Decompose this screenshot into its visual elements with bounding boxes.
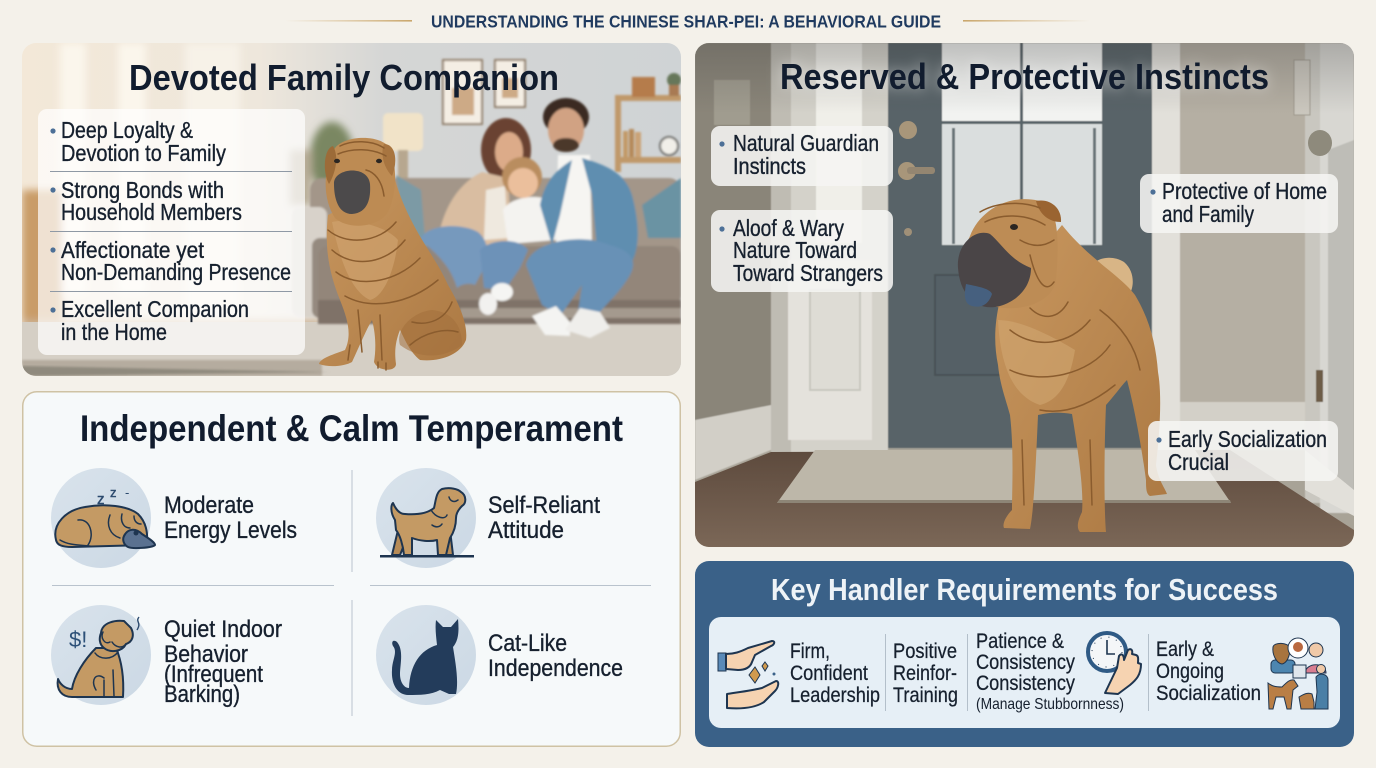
item: cat-like independence	[376, 605, 623, 705]
icon: sleeping dog	[51, 468, 155, 568]
item: quiet indoor behavior	[51, 605, 282, 708]
label: quiet indoor behavior: Quiet Indoor	[164, 616, 282, 643]
dog sitting	[319, 138, 466, 370]
label: cat-like independence: Cat-Like	[488, 630, 567, 657]
icon: guiding hands	[718, 641, 778, 708]
callout: aloof and wary	[711, 210, 893, 292]
text: early and ongoing socialization: Early &	[1156, 637, 1214, 661]
callout: natural guardian instincts	[711, 126, 893, 186]
callout: protective of home: Protective of Home	[1162, 178, 1327, 204]
callout: early socialization	[1148, 421, 1338, 481]
item: self-reliant attitude	[376, 468, 600, 568]
text: early and ongoing socialization: Ongoing	[1156, 659, 1224, 683]
photo: hallway with dog	[695, 43, 1354, 547]
floor	[695, 450, 1354, 547]
man	[543, 98, 589, 136]
woman	[481, 118, 531, 182]
text: positive reinforcement training	[893, 639, 958, 707]
heading: reserved and protective instincts: Reserved & Protective Instincts	[780, 56, 1269, 97]
icon: dogs and people	[1268, 638, 1328, 709]
callout: aloof and wary: Nature Toward	[733, 237, 857, 263]
carpet edge	[22, 366, 330, 376]
text: patience and consistency: (Manage Stubbornness)	[976, 696, 1124, 713]
icon: clock and hand	[1088, 633, 1141, 694]
panel: independent and calm temperament	[23, 392, 680, 746]
carpet	[22, 322, 681, 376]
plant	[310, 122, 354, 194]
label: quiet indoor behavior: Barking)	[164, 681, 240, 708]
label: cat-like independence: Independence	[488, 655, 623, 682]
label: quiet indoor behavior	[164, 616, 282, 708]
panel: reserved and protective instincts	[695, 43, 1354, 547]
heading: key handler requirements: Key Handler Requirements for Success	[771, 572, 1278, 607]
label: quiet indoor behavior: (Infrequent	[164, 661, 263, 688]
door hardware	[899, 121, 917, 139]
icon: cat silhouette	[376, 605, 476, 705]
callout: protective of home: and Family	[1162, 201, 1254, 227]
icon: sleeping dog: z	[97, 491, 104, 508]
card: family traits list: Affectionate yet	[61, 237, 205, 263]
callout: natural guardian instincts: Instincts	[733, 153, 806, 179]
text: firm confident leadership	[790, 639, 880, 707]
picture frames	[443, 60, 482, 124]
card: family traits list: Household Members	[61, 199, 242, 225]
icon: quiet dog	[51, 605, 151, 705]
label: moderate energy levels: Moderate	[164, 492, 254, 519]
lamp	[383, 113, 423, 151]
callout: aloof and wary: Aloof & Wary	[733, 215, 844, 241]
text: firm confident leadership: Firm,	[790, 639, 830, 663]
callout: early socialization: Crucial	[1168, 449, 1229, 475]
card: family traits list: Non-Demanding Presence	[61, 259, 291, 285]
panel: key handler requirements	[695, 561, 1354, 747]
shelf	[615, 95, 681, 101]
rug	[777, 450, 1231, 503]
panel: devoted family companion	[22, 43, 681, 376]
card: family traits list	[38, 109, 305, 355]
icon: quiet dog: $!	[69, 627, 87, 652]
photo: family room with dog	[22, 43, 681, 376]
text: positive reinforcement training: Reinfor-	[893, 661, 957, 685]
text: early and ongoing socialization	[1156, 637, 1261, 705]
text: positive reinforcement training: Positive	[893, 639, 957, 663]
label: moderate energy levels	[164, 492, 297, 544]
item: moderate energy levels	[51, 468, 297, 568]
text: early and ongoing socialization: Socialization	[1156, 681, 1261, 705]
callout: aloof and wary: Toward Strangers	[733, 260, 883, 286]
heading: reserved and protective instincts: Reserved & Protective Instincts	[780, 56, 1269, 97]
icon: sleeping dog: z	[110, 485, 116, 500]
card: family traits list: Excellent Companion	[61, 296, 249, 322]
text: firm confident leadership: Leadership	[790, 683, 880, 707]
card: family traits list: Deep Loyalty &	[61, 117, 193, 143]
heading: independent and calm temperament: Independent & Calm Temperament	[80, 408, 623, 449]
text: patience and consistency: Consistency	[976, 671, 1075, 695]
sofa	[309, 176, 681, 254]
card: family traits list: Strong Bonds with	[61, 177, 224, 203]
text: patience and consistency: Patience &	[976, 629, 1064, 653]
label: self-reliant attitude: Self-Reliant	[488, 492, 600, 519]
inner card	[709, 617, 1340, 728]
text: patience and consistency: Consistency	[976, 650, 1075, 674]
text: positive reinforcement training: Training	[893, 683, 958, 707]
icon: standing dog	[376, 468, 476, 568]
label: self-reliant attitude: Attitude	[488, 517, 564, 544]
dog standing	[958, 199, 1167, 532]
callout: natural guardian instincts: Natural Guardian	[733, 130, 879, 156]
text: firm confident leadership: Confident	[790, 661, 868, 685]
callout: protective of home	[1140, 174, 1338, 233]
child	[503, 197, 560, 244]
callout: early socialization: Early Socialization	[1168, 426, 1327, 452]
card: family traits list: Devotion to Family	[61, 140, 226, 166]
icon: sleeping dog: -	[125, 485, 129, 500]
cushions	[396, 175, 426, 252]
card: family traits list: in the Home	[61, 319, 167, 345]
label: moderate energy levels: Energy Levels	[164, 517, 297, 544]
label: quiet indoor behavior: Behavior	[164, 641, 248, 668]
text: patience and consistency	[976, 629, 1124, 713]
page title: UNDERSTANDING THE CHINESE SHAR-PEI: A BEHAVIORAL GUIDE	[431, 12, 941, 32]
label: cat-like independence	[488, 630, 623, 682]
heading: devoted family companion: Devoted Family Companion	[129, 57, 559, 98]
label: self-reliant attitude	[488, 492, 600, 544]
